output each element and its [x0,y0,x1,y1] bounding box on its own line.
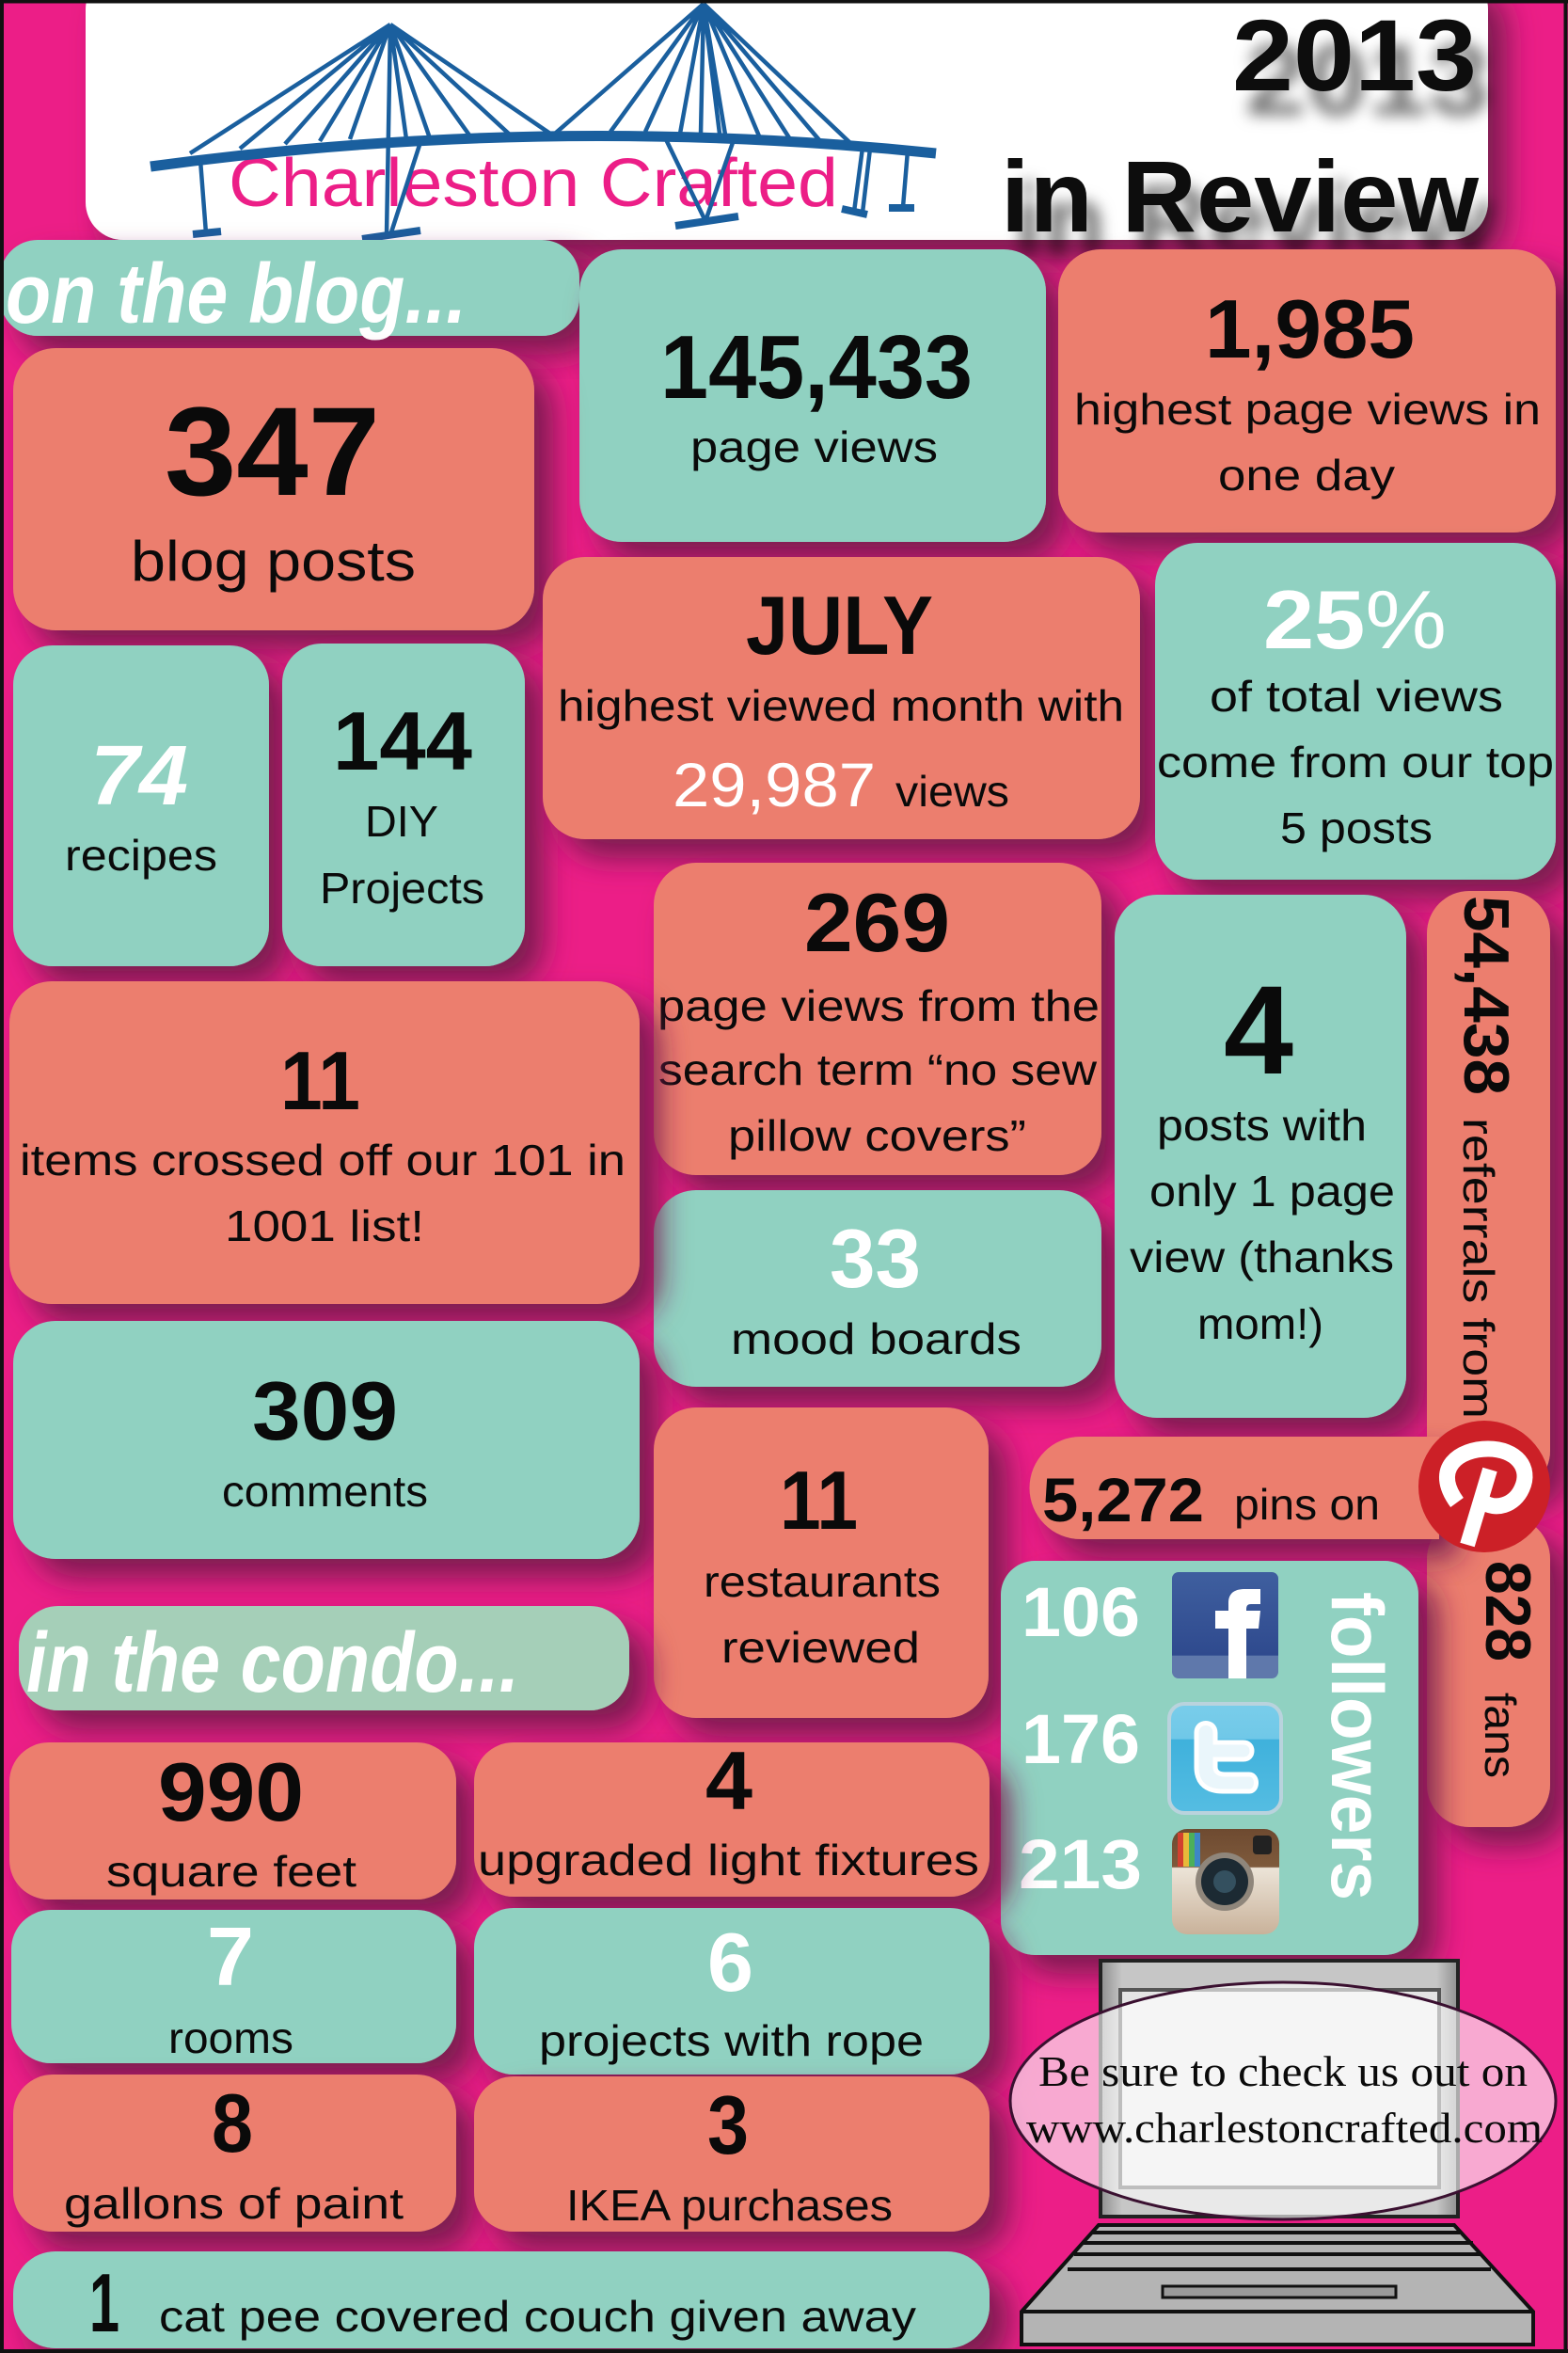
panel: July: JULY [746,579,933,672]
panel: page views: page views [690,422,938,471]
panel: pins [1029,1437,1439,1539]
panel: recipes: recipes [65,831,217,880]
panel: gallons of paint: 8 [212,2076,253,2170]
panel: couch: 1 [89,2256,119,2349]
panel: IKEA purchases: IKEA purchases [566,2181,893,2230]
panel: single page view posts [1115,895,1406,1418]
panel: gallons of paint: gallons of paint [64,2179,404,2228]
panel: single page view posts: 4 [1224,961,1293,1101]
panel: pins: pins on [1234,1480,1380,1529]
panel: rope projects [474,1908,990,2075]
heading: in the condo: in the condo... [26,1616,519,1710]
panel: Pinterest referrals [1427,891,1550,1493]
panel: couch: cat pee covered couch given away [159,2292,916,2341]
panel: 101 in 1001 list: items crossed off our 101 in [20,1136,626,1184]
panel: top 5 posts [1155,543,1556,880]
panel: single page view posts: only 1 page [1149,1167,1395,1216]
panel: July: views [895,767,1009,816]
panel: top 5 posts: 5 posts [1280,803,1433,852]
panel: gallons of paint [13,2075,456,2232]
panel: mood boards: 33 [830,1212,921,1305]
panel: search term: search term “no sew [658,1045,1098,1094]
panel: rooms: rooms [168,2013,293,2062]
panel: comments: comments [222,1467,428,1516]
panel: top 5 posts: come from our top [1157,738,1554,787]
panel: light fixtures: upgraded light fixtures [478,1836,979,1884]
panel: restaurants [654,1407,989,1718]
panel: page views: 145,433 [660,317,973,418]
panel: mood boards [654,1190,1101,1387]
panel: 101 in 1001 list: 1001 list! [225,1201,424,1250]
panel: restaurants: restaurants [704,1557,941,1606]
panel: mood boards: mood boards [731,1314,1022,1363]
panel: search term: page views from the [657,981,1100,1030]
panel: Pinterest referrals: 54,438 [1450,896,1522,1095]
panel: July [543,557,1140,839]
panel: blog posts [13,348,534,630]
panel: top 5 posts: 25% [1263,573,1447,666]
logo wordmark: Charleston Crafted [229,146,838,221]
panel: followers: followers [1316,1592,1399,1900]
panel: recipes [13,645,269,966]
panel: highest page views: one day [1218,451,1395,500]
year heading: 2013 [1232,0,1477,112]
panel: IKEA purchases: 3 [707,2078,749,2171]
panel: highest page views [1058,249,1556,533]
panel: rooms: 7 [207,1910,254,2003]
heading: on the blog: on the blog... [6,247,467,342]
panel: rope projects: 6 [707,1916,753,2009]
panel: search term: 269 [804,876,950,969]
icon: Instagram [1172,1829,1279,1934]
panel: square feet [9,1742,456,1900]
logo: Charleston Crafted bridge [150,4,936,239]
panel: Pinterest fans: 828 [1472,1561,1544,1661]
panel: 101 in 1001 list [9,981,640,1304]
panel: single page view posts: view (thanks [1130,1232,1394,1281]
panel: 101 in 1001 list: 11 [280,1034,360,1127]
panel: followers: 106 [1022,1573,1140,1651]
panel: highest page views: highest page views in [1074,385,1541,434]
panel: rooms [11,1910,456,2063]
panel: blog posts: 347 [165,382,380,522]
panel: couch [13,2251,990,2349]
panel: pins: 5,272 [1042,1465,1204,1534]
panel: restaurants: 11 [780,1454,858,1547]
panel: IKEA purchases [474,2076,990,2232]
panel: DIY projects: DIY [365,797,438,846]
panel: square feet: 990 [158,1745,304,1838]
panel: followers: 213 [1019,1825,1142,1903]
panel: recipes: 74 [90,729,188,823]
panel: header [86,0,1488,253]
panel: top 5 posts: of total views [1210,672,1503,721]
panel: DIY projects: 144 [333,694,472,787]
callout: website: Be sure to check us out on [1038,2047,1528,2095]
panel: comments [13,1321,640,1559]
panel: light fixtures [474,1734,990,1897]
icon: Twitter [1169,1704,1281,1813]
panel: comments: 309 [252,1364,398,1457]
panel: single page view posts: posts with [1157,1101,1367,1150]
panel: rope projects: projects with rope [539,2016,924,2065]
panel: square feet: square feet [106,1847,356,1896]
panel: followers [1001,1561,1418,1955]
heading: in Review: in Review [1001,139,1480,253]
panel: page views [579,249,1046,542]
panel: highest page views: 1,985 [1205,282,1415,375]
panel: July: 29,987 [673,750,876,819]
panel: Pinterest referrals: referrals from [1454,1118,1503,1419]
panel: search term [654,863,1101,1175]
icon: Facebook [1172,1572,1278,1678]
callout: website: www.charlestoncrafted.com [1026,2104,1543,2152]
panel: Pinterest fans: fans [1476,1693,1525,1778]
icon: Pinterest [1418,1421,1550,1552]
panel: Pinterest fans [1427,1517,1550,1827]
callout: website [1010,1982,1556,2219]
panel: blog posts: blog posts [131,530,416,593]
panel: light fixtures: 4 [705,1734,752,1827]
panel: DIY projects: Projects [320,864,484,913]
panel: DIY projects [282,644,525,966]
panel: July: highest viewed month with [558,681,1124,730]
panel: followers: 176 [1022,1700,1140,1778]
panel: search term: pillow covers” [728,1111,1026,1160]
panel: restaurants: reviewed [721,1623,920,1672]
icon: laptop [1022,1961,1533,2345]
panel: single page view posts: mom!) [1197,1299,1323,1348]
